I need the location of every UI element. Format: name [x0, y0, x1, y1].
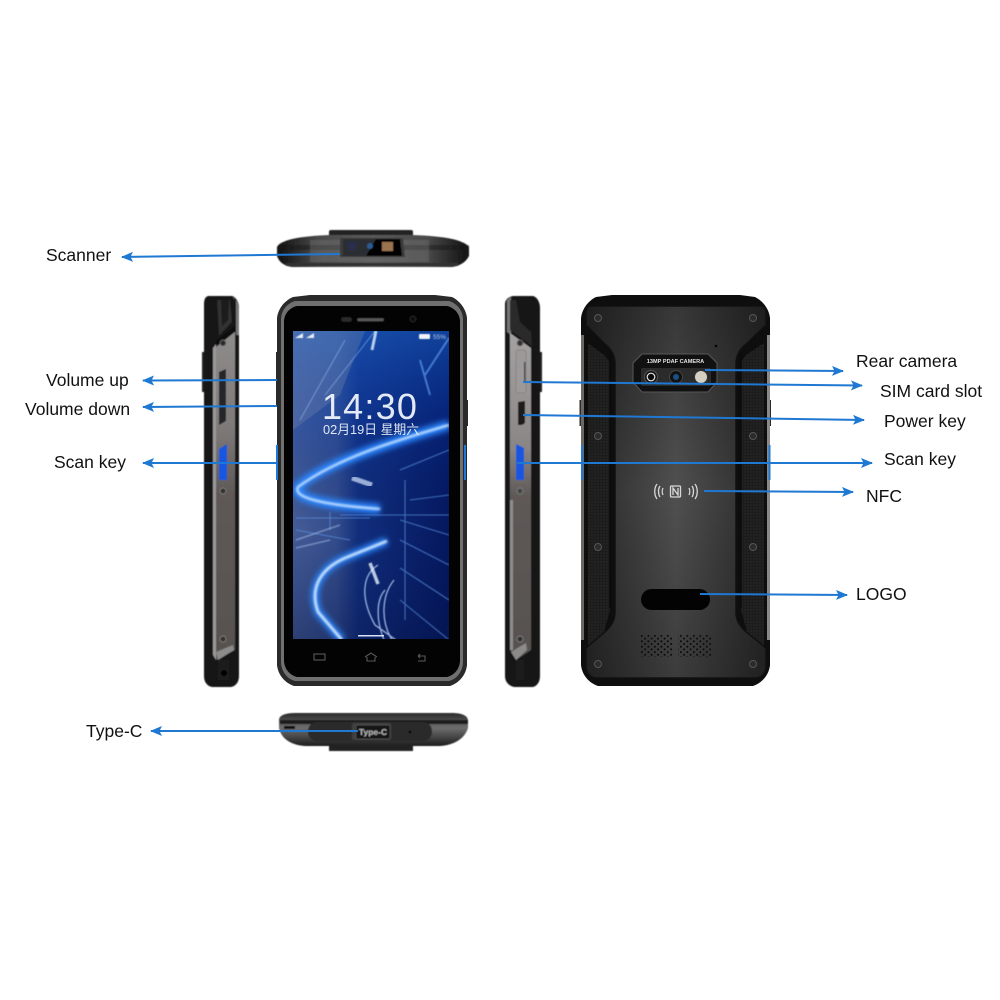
- SIM card slot: [516, 350, 526, 393]
- label: SIM card slot: [523, 381, 982, 401]
- arrow: NFC: [704, 491, 853, 492]
- arrow: Type-C: [151, 730, 358, 732]
- Type-C port: [352, 723, 391, 740]
- camera module: [633, 354, 717, 392]
- arrow: Rear camera: [705, 370, 843, 371]
- top view of device with scanner: [277, 230, 469, 267]
- speaker grilles: [640, 635, 711, 657]
- arrow: Scanner: [122, 254, 340, 257]
- label: Scanner: [46, 245, 340, 265]
- arrow: LOGO: [700, 594, 847, 595]
- label: Rear camera: Rear camera: [856, 351, 957, 371]
- status bar: 55%: [433, 334, 446, 341]
- scan key: [516, 444, 524, 480]
- rubber side panels: [588, 343, 764, 646]
- volume keys: [219, 369, 226, 425]
- camera label: 13MP PDAF CAMERA: [647, 359, 704, 365]
- logo plate: [641, 589, 710, 610]
- arrow: Power key: [523, 415, 864, 420]
- front view of device: [276, 295, 468, 686]
- label: LOGO: LOGO: [856, 584, 907, 604]
- right side view of device: [505, 296, 542, 687]
- infographic canvas: [25, 229, 982, 752]
- power key: [518, 401, 525, 425]
- date: 02月19日 星期六: [323, 422, 419, 437]
- scan key: [219, 444, 227, 480]
- label: Power key: [523, 411, 966, 431]
- label: SIM card slot: SIM card slot: [880, 381, 982, 401]
- earpiece and sensors: [341, 316, 416, 322]
- arrow: Scan key left: [143, 462, 277, 464]
- screws: [594, 314, 756, 668]
- label: Scan key right: Scan key: [884, 449, 956, 469]
- back cover: [586, 306, 766, 678]
- scanner window: [340, 238, 405, 257]
- label: Power key: Power key: [884, 411, 966, 431]
- label: Scanner: Scanner: [46, 245, 111, 265]
- status bar: [295, 333, 446, 341]
- label: Volume up: Volume up: [46, 370, 129, 390]
- back view of device: [580, 295, 771, 686]
- arrow: Volume down: [143, 406, 277, 407]
- bottom view of device: [279, 713, 468, 751]
- label: Type-C: Type-C: [86, 721, 142, 741]
- label: NFC: NFC: [866, 486, 902, 506]
- arrow: Scan key right: [517, 462, 872, 464]
- clock: 14:30: [322, 386, 418, 427]
- label: Scan key left: Scan key: [54, 452, 126, 472]
- blue scan key edge markers: [276, 445, 770, 480]
- arrow: Volume up: [143, 379, 277, 382]
- NFC mark: [655, 484, 697, 499]
- Type-C port: Type-C: [359, 727, 387, 737]
- arrow: SIM card slot: [523, 382, 862, 386]
- left side view of device: [202, 296, 239, 687]
- label: Volume down: Volume down: [25, 399, 130, 419]
- navigation keys: [314, 653, 425, 661]
- screen wallpaper: [293, 331, 449, 640]
